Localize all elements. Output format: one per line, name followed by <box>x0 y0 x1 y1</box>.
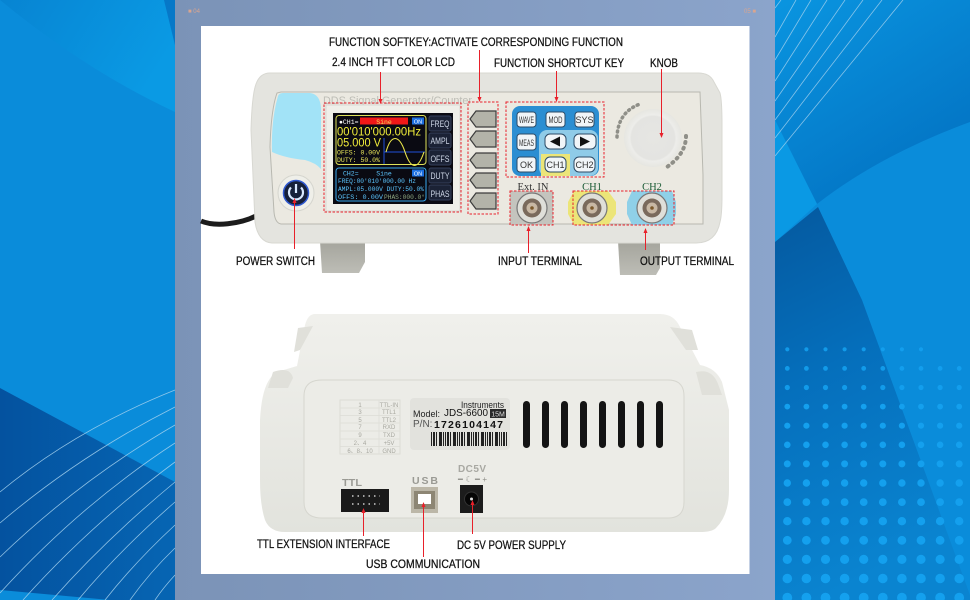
rear side grips <box>268 326 722 395</box>
softkey labels: DUTY <box>430 171 450 181</box>
white product sheet <box>201 26 750 574</box>
channel 1 box <box>336 116 426 164</box>
arrow: USB <box>422 502 426 557</box>
background: left blue panel <box>0 0 175 600</box>
left foot <box>320 241 365 273</box>
label: TTL: TTL EXTENSION INTERFACE <box>257 539 390 551</box>
background: right blue panel with dots <box>775 0 970 600</box>
DC5V caption: ━ ☾ ━ + <box>457 475 487 484</box>
LCD screen: 00'010'000.00Hz <box>337 126 421 138</box>
label: input terminal: INPUT TERMINAL <box>498 256 583 268</box>
label: function softkey: FUNCTION SOFTKEY:ACTIVATE CORRESPONDING FUNCTION <box>329 37 623 49</box>
inner face <box>270 92 703 224</box>
TTL pin table: +5V <box>384 441 394 447</box>
LCD bezel <box>326 105 460 211</box>
LCD screen: ON <box>414 120 422 126</box>
softkey labels: OFFS <box>430 154 450 164</box>
TTL pin table: 7 <box>358 425 362 431</box>
knob <box>617 104 686 169</box>
connector labels: CH1 <box>582 182 602 193</box>
label: shortcut key: FUNCTION SHORTCUT KEY <box>494 58 624 70</box>
model label sticker: JDS-6600 <box>444 408 488 419</box>
LCD screen: FREQ:00'010'000.00 Hz <box>338 178 416 185</box>
model caption: DDS Signal Generator/Counter <box>323 95 472 107</box>
rear panel of the generator <box>260 314 729 532</box>
LCD screen: 05.000 V <box>337 138 381 150</box>
arrow: LCD <box>378 72 382 104</box>
model label sticker: Model: <box>413 409 440 420</box>
label: output terminal: OUTPUT TERMINAL <box>640 256 735 268</box>
DC5V caption: DC5V <box>458 464 486 475</box>
power cable <box>201 216 256 224</box>
light blue panel <box>272 93 321 169</box>
arrow: input terminal <box>526 226 530 253</box>
CH2 BNC connector <box>637 193 667 223</box>
background: centre panel: ■ 04 <box>188 9 201 15</box>
TTL pin table: GND <box>382 449 396 455</box>
function softkeys <box>470 111 496 209</box>
arrow: knob <box>660 69 664 138</box>
TTL pin table: 2、4 <box>354 441 367 447</box>
USB port <box>411 487 438 513</box>
DC power jack <box>460 485 483 513</box>
softkey labels: AMPL <box>430 136 450 146</box>
softkey labels <box>429 116 451 200</box>
background: centre panel: 05 ■ <box>744 9 756 15</box>
shortcut key panel: SYS <box>575 115 594 125</box>
TTL pin table: TTL1 <box>382 410 397 416</box>
LCD screen: DUTY: 50.0% <box>337 157 380 164</box>
background: centre panel <box>175 0 775 600</box>
shortcut key panel <box>512 106 599 176</box>
TTL pin table: 5 <box>358 418 362 424</box>
arrow: shortcut key <box>554 71 558 102</box>
softkey labels: PHAS <box>430 189 450 199</box>
TTL pin table <box>340 400 400 455</box>
shortcut key panel: WAVE <box>519 115 534 125</box>
TTL pin table: 1 <box>358 403 362 409</box>
label: knob: KNOB <box>650 58 678 70</box>
shortcut key panel: CH2 <box>575 160 594 170</box>
TTL pin table: 3 <box>358 410 362 416</box>
shortcut key panel: MEAS <box>519 138 534 148</box>
shortcut key panel: CH1 <box>546 160 565 170</box>
TTL pin table: 6、8、10 <box>347 449 373 455</box>
TTL pin table: TTL2 <box>382 418 397 424</box>
front housing <box>251 73 722 243</box>
connector labels <box>518 182 662 193</box>
label: DC: DC 5V POWER SUPPLY <box>457 540 566 552</box>
LCD screen: OFFS: 0.00V <box>337 150 380 156</box>
LCD screen <box>333 113 453 204</box>
arrow: TTL <box>362 508 366 536</box>
front panel of the generator <box>251 73 722 243</box>
arrow: output terminal <box>644 228 648 250</box>
LCD screen: AMPL:05.000V DUTY:50.0% <box>338 186 424 193</box>
softkey labels: FREQ <box>430 119 450 129</box>
rear inset panel <box>304 380 684 518</box>
LCD screen: PHAS:000.0° <box>384 194 425 201</box>
LCD screen: OFFS: 0.00V <box>338 194 383 201</box>
LCD screen: Sine <box>376 119 392 126</box>
model label sticker: 15M <box>491 412 505 418</box>
TTL pin table: 9 <box>358 433 362 439</box>
label: LCD: 2.4 INCH TFT COLOR LCD <box>332 57 455 69</box>
arrow: softkey <box>478 50 482 102</box>
channel 2 box <box>336 168 426 201</box>
LCD screen: CH2= <box>343 170 359 178</box>
model label sticker: P/N: <box>413 419 432 430</box>
TTL caption: TTL <box>342 477 363 489</box>
LCD screen: ●CH1= <box>339 119 359 126</box>
model label sticker: Instruments <box>461 400 504 411</box>
shortcut key panel: OK <box>520 160 533 170</box>
Ext. IN BNC connector <box>517 193 547 223</box>
connector labels: Ext. IN <box>518 182 549 193</box>
connector labels: CH2 <box>642 182 662 193</box>
label: USB: USB COMMUNICATION <box>366 559 480 571</box>
connector backgrounds <box>510 191 676 225</box>
CH1 BNC connector <box>577 193 607 223</box>
TTL pin table: TXD <box>383 433 396 439</box>
arrow: DC <box>470 500 474 534</box>
model label sticker: 1726104147 <box>434 419 503 431</box>
TTL pin table: RXD <box>383 425 396 431</box>
USB caption: USB <box>412 475 438 487</box>
DC5V caption <box>457 464 487 484</box>
model label sticker <box>410 398 510 450</box>
LCD screen: ON <box>414 172 422 178</box>
power button <box>278 175 314 211</box>
TTL port <box>341 489 389 512</box>
label: power switch: POWER SWITCH <box>236 256 315 268</box>
rear housing <box>260 314 729 532</box>
ventilation slots <box>523 401 663 448</box>
right foot <box>618 241 660 275</box>
TTL pin table: TTL-IN <box>380 403 398 409</box>
shortcut key panel: MOD <box>548 115 563 125</box>
red dashed highlight boxes <box>324 102 674 225</box>
LCD screen: Sine <box>376 170 392 178</box>
arrow: power switch <box>292 198 296 249</box>
